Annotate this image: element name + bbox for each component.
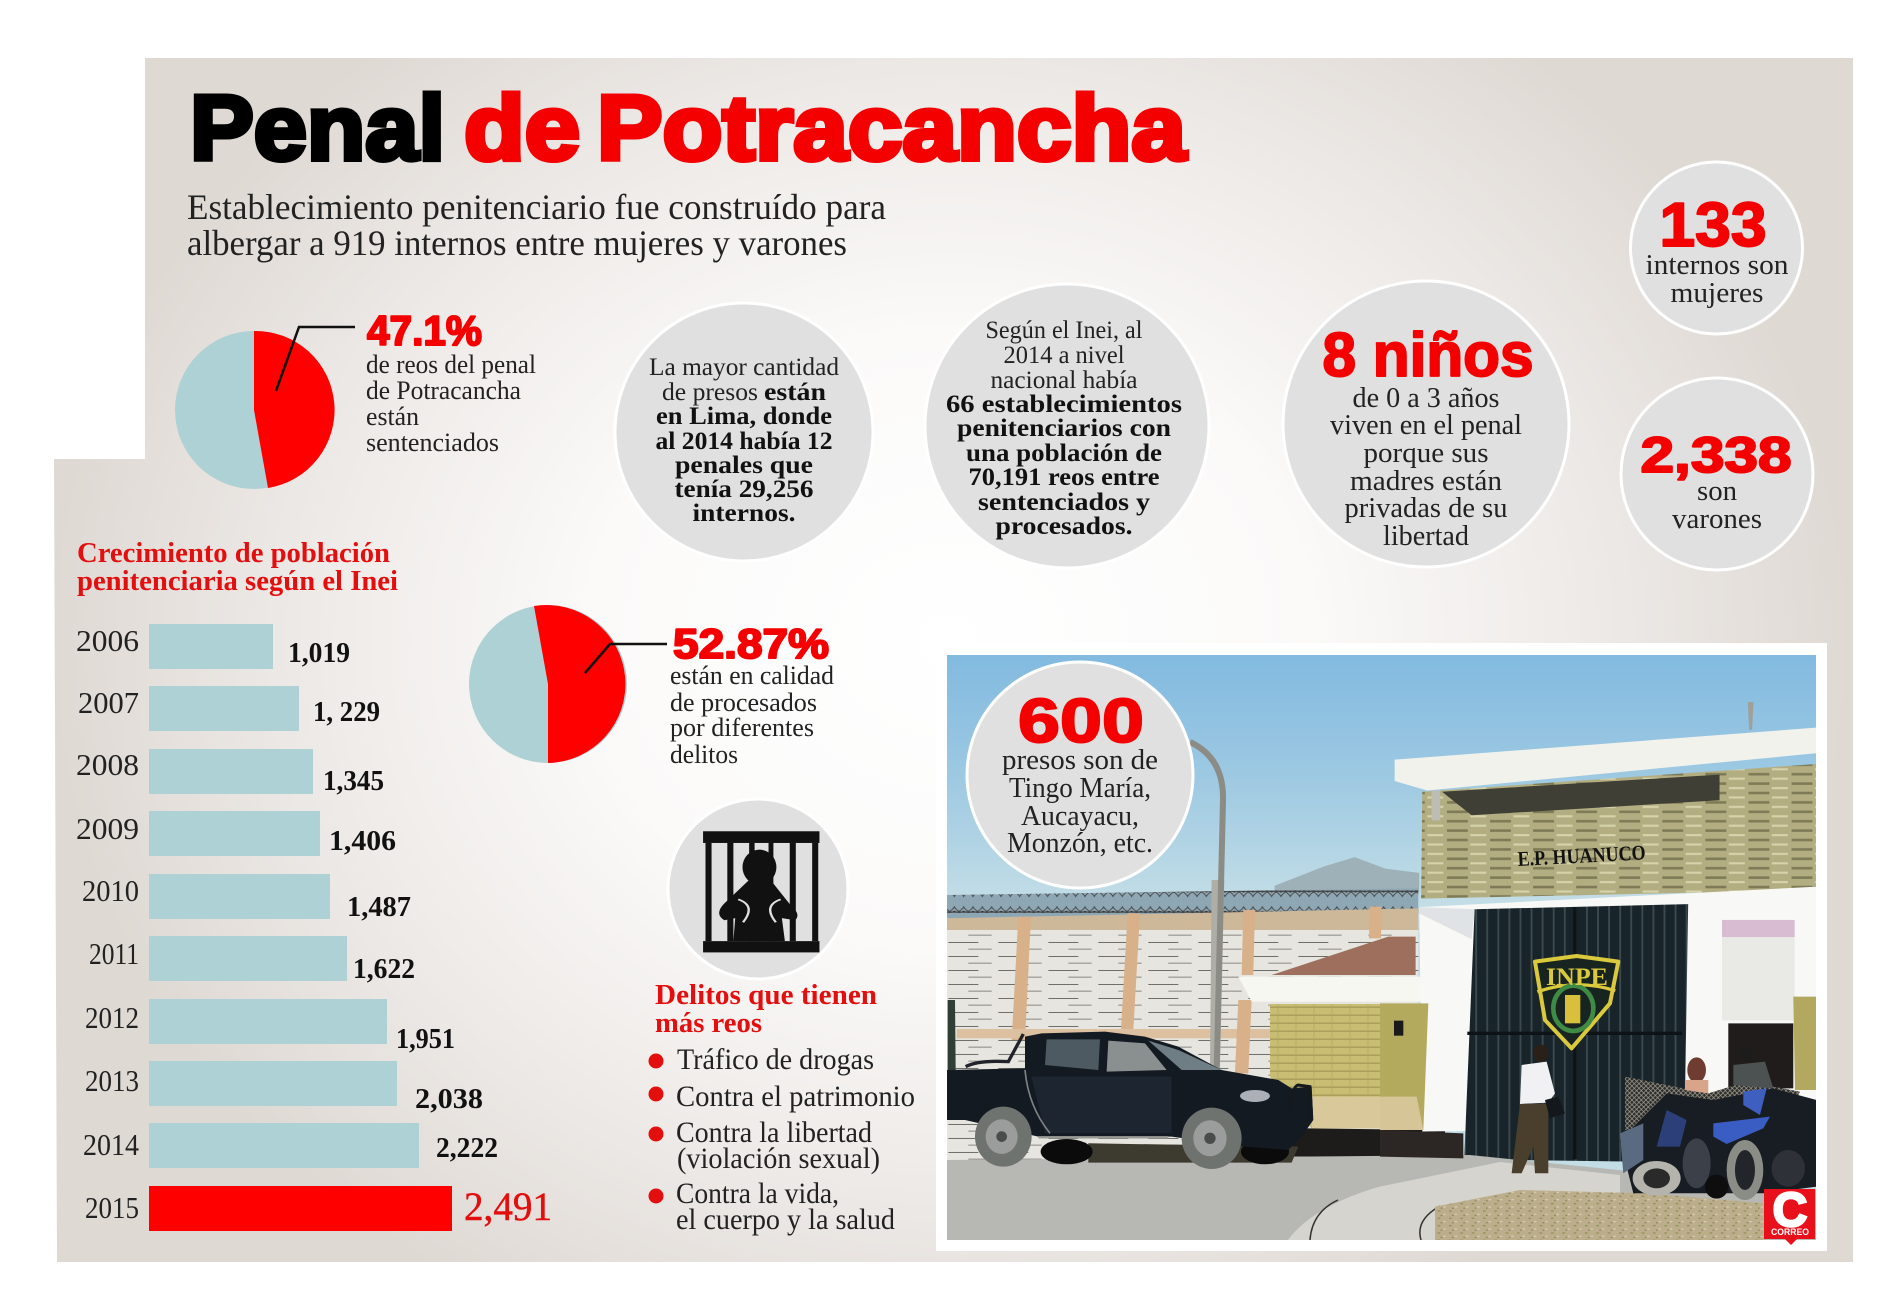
- circle: nivel nacional: 2014 a nivel: [1004, 342, 1125, 369]
- bar chart: población penitenciaria 2006-2015: 2,222: [436, 1132, 498, 1164]
- list: delitos que tienen más reos: Contra la libertad: [676, 1116, 872, 1149]
- bar chart: población penitenciaria 2006-2015: 1,345: [323, 765, 384, 797]
- callout: 52.87% procesados: por diferentes: [670, 713, 814, 742]
- title: Potracancha: [597, 78, 1187, 180]
- callout: 47.1% sentenciados: [366, 307, 536, 457]
- list: delitos que tienen más reos: [648, 979, 915, 1236]
- callout: 52.87% procesados: de procesados: [670, 688, 817, 717]
- circle: nivel nacional: procesados.: [996, 513, 1132, 540]
- circle: 600 presos: Tingo María,: [1009, 773, 1151, 804]
- subtitle: [187, 187, 886, 263]
- circle: 8 niños: madres están: [1350, 465, 1502, 497]
- circle: 2,338 varones: [1621, 378, 1813, 570]
- circle: nivel nacional: 70,191 reos entre: [968, 464, 1160, 491]
- callout: 52.87% procesados: están en calidad: [670, 661, 834, 690]
- circle: presos en Lima: penales que: [675, 452, 813, 479]
- photo: entrada del penal: [936, 643, 1827, 1251]
- bar chart: población penitenciaria 2006-2015: 1,406: [329, 825, 396, 857]
- bar chart: población penitenciaria 2006-2015: 1,487: [347, 891, 411, 923]
- title: Penal: [190, 78, 445, 180]
- callout: 52.87% procesados: delitos: [670, 740, 738, 769]
- circle: nivel nacional: [925, 284, 1209, 568]
- circle: presos en Lima: internos.: [692, 500, 796, 527]
- pie chart: sentenciados 47.1%: [175, 327, 355, 489]
- bar chart: población penitenciaria 2006-2015: 2010: [82, 873, 139, 908]
- bar chart heading: penitenciaria según el Inei: [77, 565, 398, 597]
- circle: 8 niños: libertad: [1383, 520, 1469, 552]
- circle: presos en Lima: tenía 29,256: [674, 476, 814, 503]
- bar chart: población penitenciaria 2006-2015: 2007: [78, 685, 139, 720]
- circle: 133 mujeres: [1630, 162, 1802, 334]
- circle: 8 niños: 8 niños: [1322, 321, 1534, 390]
- callout: 52.87% procesados: [670, 620, 834, 769]
- bar chart: población penitenciaria 2006-2015: 2012: [85, 1000, 139, 1035]
- logo: Correo: C: [1773, 1184, 1807, 1237]
- callout: 47.1% sentenciados: están: [366, 402, 419, 431]
- bar chart: población penitenciaria 2006-2015: 2,038: [415, 1083, 483, 1115]
- bar chart: población penitenciaria 2006-2015: 2013: [85, 1063, 139, 1098]
- list: delitos que tienen más reos: Delitos que tienen: [655, 979, 877, 1011]
- bar chart: población penitenciaria 2006-2015: [76, 623, 552, 1231]
- pie chart: procesados 52.87%: [469, 605, 667, 763]
- circle: 8 niños: viven en el penal: [1330, 409, 1522, 441]
- circle: 133 mujeres: 133: [1660, 191, 1766, 260]
- bar chart: población penitenciaria 2006-2015: 2015: [85, 1190, 139, 1225]
- circle: 8 niños: privadas de su: [1344, 492, 1508, 524]
- upper scene (sky objects and building): [1275, 702, 1753, 892]
- circle: presos en Lima: [615, 303, 873, 561]
- circle: 600 presos: Aucayacu,: [1021, 801, 1139, 832]
- circle: presos en Lima: en Lima, donde: [656, 403, 832, 430]
- circle: 600 presos: [967, 662, 1193, 888]
- road: [947, 1155, 1816, 1240]
- circle: 8 niños: [1283, 281, 1569, 567]
- bar chart: población penitenciaria 2006-2015: 2009: [76, 811, 139, 846]
- circle: nivel nacional: nacional había: [990, 367, 1138, 394]
- circle: presos en Lima: al 2014 había 12: [656, 428, 832, 455]
- circle: nivel nacional: penitenciarios con: [957, 415, 1171, 442]
- list: delitos que tienen más reos: Contra el patrimonio: [676, 1080, 915, 1113]
- sign: INPE shield: INPE: [1546, 964, 1608, 991]
- circle: 133 mujeres: internos son: [1646, 250, 1788, 281]
- circle: presos en Lima: están: [764, 379, 826, 406]
- subtitle: albergar a 919 internos entre mujeres y varones: [187, 223, 847, 263]
- circle: 8 niños: porque sus: [1364, 437, 1488, 469]
- circle: 2,338 varones: varones: [1672, 504, 1762, 535]
- title: de: [464, 78, 580, 180]
- circle: 600 presos: presos son de: [1002, 745, 1158, 776]
- bar chart: población penitenciaria 2006-2015: 1, 229: [313, 696, 380, 728]
- list: delitos que tienen más reos: Tráfico de drogas: [677, 1043, 874, 1076]
- callout: 47.1% sentenciados: sentenciados: [366, 428, 499, 457]
- circle: nivel nacional: una población de: [966, 440, 1162, 467]
- icon: preso tras las rejas: [668, 799, 848, 979]
- callout: 52.87% procesados: 52.87%: [673, 620, 829, 667]
- circle: presos en Lima: La mayor cantidad: [649, 354, 839, 381]
- sign: E.P. Huanuco: E.P. HUANUCO: [1517, 840, 1646, 871]
- list: delitos que tienen más reos: el cuerpo y la salud: [676, 1203, 895, 1236]
- list: delitos que tienen más reos: más reos: [655, 1007, 762, 1039]
- list: delitos que tienen más reos: (violación sexual): [677, 1142, 880, 1175]
- title: [190, 78, 1187, 180]
- circle: nivel nacional: sentenciados y: [978, 489, 1151, 516]
- logo: Correo: CORREO: [1771, 1227, 1809, 1237]
- circle: 600 presos: Monzón, etc.: [1007, 828, 1153, 859]
- bar chart: población penitenciaria 2006-2015: 1,019: [288, 637, 350, 669]
- circle: 2,338 varones: son: [1697, 476, 1737, 507]
- logo: Correo: [1764, 1184, 1815, 1245]
- list: delitos que tienen más reos: Contra la vida,: [676, 1177, 839, 1210]
- circle: 8 niños: de 0 a 3 años: [1352, 382, 1500, 414]
- bar chart: población penitenciaria 2006-2015: 2011: [89, 936, 139, 971]
- bar chart: población penitenciaria 2006-2015: 2008: [76, 747, 139, 782]
- bar chart: población penitenciaria 2006-2015: 1,622: [353, 953, 415, 985]
- gate detail, people, motorcycles, grass: [1380, 956, 1817, 1240]
- circle: 600 presos: 600: [1018, 687, 1144, 756]
- circle: nivel nacional: 66 establecimientos: [946, 391, 1182, 418]
- circle: nivel nacional: Según el Inei, al: [986, 317, 1143, 344]
- circle: 133 mujeres: mujeres: [1670, 278, 1764, 309]
- bar chart: población penitenciaria 2006-2015: 1,951: [396, 1023, 455, 1055]
- subtitle: Establecimiento penitenciario fue construído para: [187, 187, 886, 227]
- wall, wire and roof tiles: [945, 880, 1445, 1163]
- callout: 47.1% sentenciados: 47.1%: [367, 307, 482, 354]
- bar chart heading: Crecimiento de población: [77, 537, 390, 569]
- truck: pickup: [945, 1000, 1313, 1169]
- callout: 47.1% sentenciados: de Potracancha: [366, 376, 521, 405]
- bar chart: población penitenciaria 2006-2015: 2014: [83, 1127, 139, 1162]
- circle: presos en Lima: de presos: [662, 379, 758, 406]
- circle: 2,338 varones: 2,338: [1640, 427, 1792, 483]
- bar chart: población penitenciaria 2006-2015: 2006: [76, 623, 139, 658]
- bar chart: población penitenciaria 2006-2015: 2,491: [464, 1184, 552, 1229]
- callout: 47.1% sentenciados: de reos del penal: [366, 350, 536, 379]
- bar chart heading: [77, 537, 398, 597]
